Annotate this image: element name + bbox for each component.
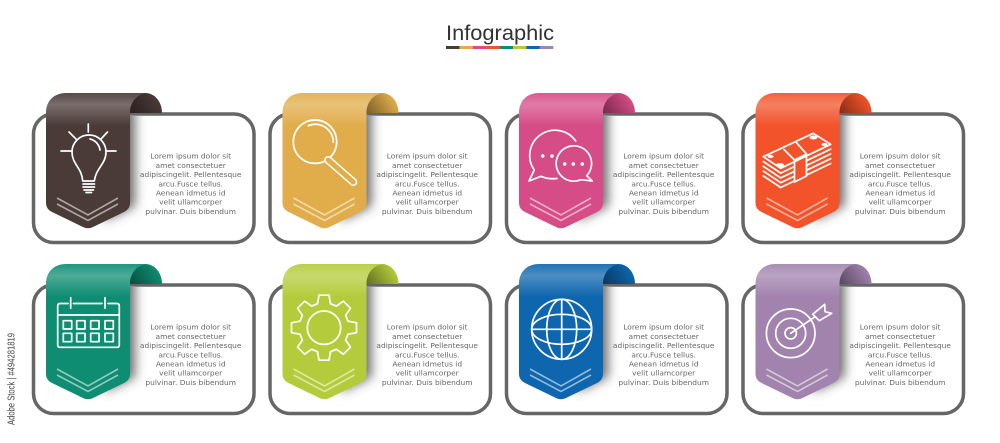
text block: amet consectetuer [392, 161, 463, 170]
text block: velit ullamcorper [159, 198, 223, 207]
icon: magnifier [293, 120, 353, 182]
text block [613, 323, 715, 387]
icon: gear [292, 295, 356, 360]
text block: adipiscingelit. Pellentesque [140, 170, 242, 179]
title: Infographic [446, 22, 554, 45]
text block: amet consectetuer [865, 332, 936, 341]
text block: velit ullamcorper [632, 369, 696, 378]
text block: Aenean idmetus id [629, 360, 699, 368]
text block: arcu.Fusce tellus. [158, 350, 223, 359]
icon: calendar [58, 298, 119, 347]
text block: velit ullamcorper [869, 369, 933, 378]
text block: adipiscingelit. Pellentesque [849, 170, 951, 179]
text block: Aenean idmetus id [865, 360, 935, 368]
panel: money card [743, 93, 964, 242]
text block [849, 152, 951, 216]
text block: amet consectetuer [156, 332, 227, 341]
text block: arcu.Fusce tellus. [868, 350, 933, 359]
text block: amet consectetuer [629, 332, 700, 341]
text block: Aenean idmetus id [392, 188, 462, 198]
text block: arcu.Fusce tellus. [158, 179, 223, 188]
icon: chat bubbles [529, 130, 592, 181]
text block: adipiscingelit. Pellentesque [140, 341, 242, 350]
stock id side label: Adobe Stock | #494281819 [6, 333, 18, 425]
text block: velit ullamcorper [869, 198, 933, 207]
text block: pulvinar. Duis bibendum [855, 207, 945, 216]
text block: Lorem ipsum dolor sit [387, 152, 468, 161]
text block: pulvinar. Duis bibendum [855, 378, 945, 387]
text block: velit ullamcorper [396, 369, 460, 378]
text block: amet consectetuer [156, 161, 227, 170]
panel: chat card [506, 93, 727, 242]
text block: Lorem ipsum dolor sit [860, 152, 941, 161]
text block: Aenean idmetus id [156, 360, 226, 368]
panel: magnifier card [270, 93, 490, 242]
text block: pulvinar. Duis bibendum [145, 207, 236, 216]
text block: adipiscingelit. Pellentesque [613, 341, 715, 350]
text block: pulvinar. Duis bibendum [382, 207, 472, 216]
text block: velit ullamcorper [396, 198, 460, 207]
text block: amet consectetuer [629, 161, 700, 170]
text block: Aenean idmetus id [156, 188, 226, 198]
text block: arcu.Fusce tellus. [395, 179, 460, 188]
panel: globe card [506, 264, 727, 414]
text block: pulvinar. Duis bibendum [618, 378, 709, 387]
text block: pulvinar. Duis bibendum [382, 378, 472, 387]
icon: globe [532, 299, 592, 359]
text block: arcu.Fusce tellus. [868, 179, 933, 188]
icon: lightbulb [61, 124, 116, 192]
text block [376, 323, 478, 387]
text block: velit ullamcorper [632, 198, 696, 207]
text block [376, 152, 478, 216]
text block [140, 152, 242, 216]
text block [849, 323, 951, 387]
text block: Lorem ipsum dolor sit [623, 152, 704, 161]
text block: Lorem ipsum dolor sit [387, 323, 468, 332]
text block: arcu.Fusce tellus. [395, 350, 460, 359]
text block: Aenean idmetus id [629, 188, 699, 198]
text block: Lorem ipsum dolor sit [623, 323, 704, 332]
text block: Lorem ipsum dolor sit [150, 152, 231, 161]
text block: adipiscingelit. Pellentesque [376, 341, 478, 350]
text block: amet consectetuer [392, 332, 463, 341]
text block: Aenean idmetus id [392, 360, 462, 368]
text block: adipiscingelit. Pellentesque [613, 170, 715, 179]
text block: arcu.Fusce tellus. [631, 350, 696, 359]
title colour bar [446, 46, 553, 49]
text block [613, 152, 715, 216]
icon: target with arrow [766, 304, 832, 358]
panel: lightbulb card [34, 93, 254, 242]
panel: gear card [270, 264, 490, 414]
text block: pulvinar. Duis bibendum [618, 207, 709, 216]
text block: pulvinar. Duis bibendum [145, 378, 236, 387]
text block: Lorem ipsum dolor sit [150, 323, 231, 332]
panel: calendar card [34, 264, 254, 414]
text block: adipiscingelit. Pellentesque [849, 341, 951, 350]
icon: stack of money [763, 133, 831, 188]
text block: Lorem ipsum dolor sit [860, 323, 941, 332]
panel: target card [743, 264, 964, 414]
text block: velit ullamcorper [159, 369, 223, 378]
text block: arcu.Fusce tellus. [631, 179, 696, 188]
text block [140, 323, 242, 387]
text block: Aenean idmetus id [865, 188, 935, 198]
text block: amet consectetuer [865, 161, 936, 170]
text block: adipiscingelit. Pellentesque [376, 170, 478, 179]
